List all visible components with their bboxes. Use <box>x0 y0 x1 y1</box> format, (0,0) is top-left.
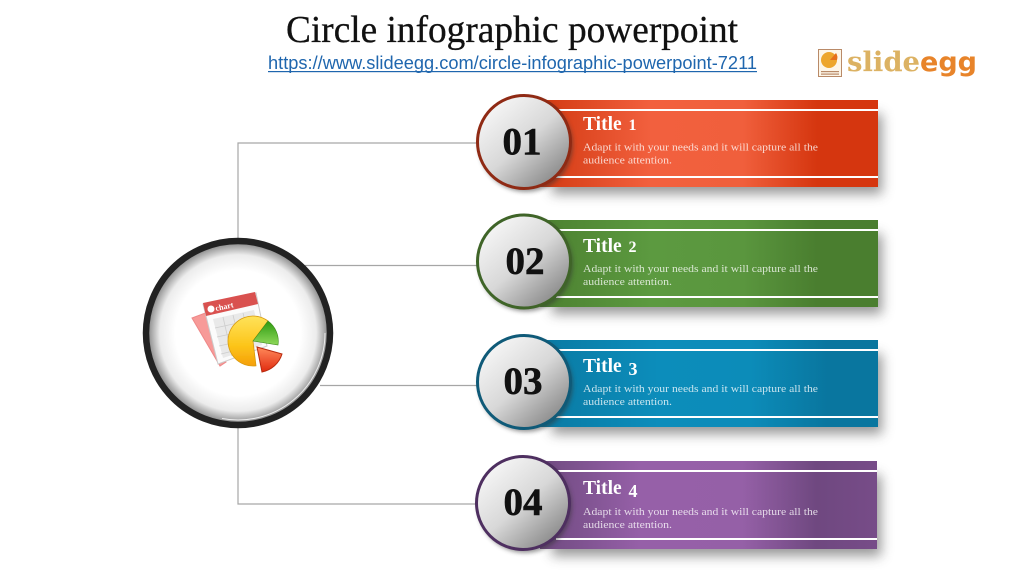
text 2: audience attention. <box>583 276 672 288</box>
text 2 <box>583 236 818 288</box>
ribbon 4 <box>540 461 877 549</box>
text 1: Adapt it with your needs and it will capture all the <box>583 142 818 154</box>
bar shadow 4 <box>552 475 881 556</box>
text 3: Title <box>583 356 622 377</box>
text 4: 4 <box>629 481 638 501</box>
text 2: Adapt it with your needs and it will capture all the <box>583 263 818 275</box>
number badge 2: 02 <box>506 240 544 283</box>
bar shadow 3 <box>552 354 882 434</box>
logo: slideegg: slide <box>847 47 920 78</box>
text 2: Title 2 <box>583 236 637 257</box>
bar shadow 2 <box>552 234 882 314</box>
title: Circle infographic powerpoint <box>286 9 738 51</box>
row 2 <box>478 215 882 314</box>
logo: slideegg <box>818 47 977 78</box>
central circle <box>146 241 330 425</box>
number badge 1: 01 <box>502 120 542 164</box>
number badge 2 <box>478 215 573 312</box>
icon: chart document with pie: chart <box>215 300 235 313</box>
number badge 3: 03 <box>504 360 542 403</box>
row 3 <box>478 336 882 434</box>
text 1: audience attention. <box>583 154 672 166</box>
text 3: audience attention. <box>583 396 672 408</box>
connector lines <box>238 143 478 504</box>
number badge 4: 04 <box>504 481 542 524</box>
ribbon 1 <box>540 100 878 187</box>
row 4 <box>476 456 881 556</box>
text 3 <box>583 356 818 408</box>
number badge 4 <box>476 456 572 553</box>
text 4: Adapt it with your needs and it will capture all the <box>583 506 818 518</box>
text 3: Adapt it with your needs and it will capture all the <box>583 383 818 395</box>
text 1 <box>583 114 818 166</box>
ribbon 3 <box>540 340 878 427</box>
logo: slideegg: egg <box>920 47 977 78</box>
text 3: 3 <box>629 359 638 379</box>
text 4: audience attention. <box>583 519 672 531</box>
row 1 <box>478 96 882 194</box>
ribbon 2 <box>540 220 878 307</box>
text 1: Title 1 <box>583 114 637 135</box>
number badge 3 <box>478 336 573 432</box>
text 4 <box>583 478 818 531</box>
text 4: Title <box>583 478 622 499</box>
link: https://www.slideegg.com/circle-infographic-powerpoint-7211 <box>268 53 757 73</box>
icon: chart document with pie <box>192 292 282 372</box>
bar shadow 1 <box>552 114 882 194</box>
number badge 1 <box>478 96 573 192</box>
